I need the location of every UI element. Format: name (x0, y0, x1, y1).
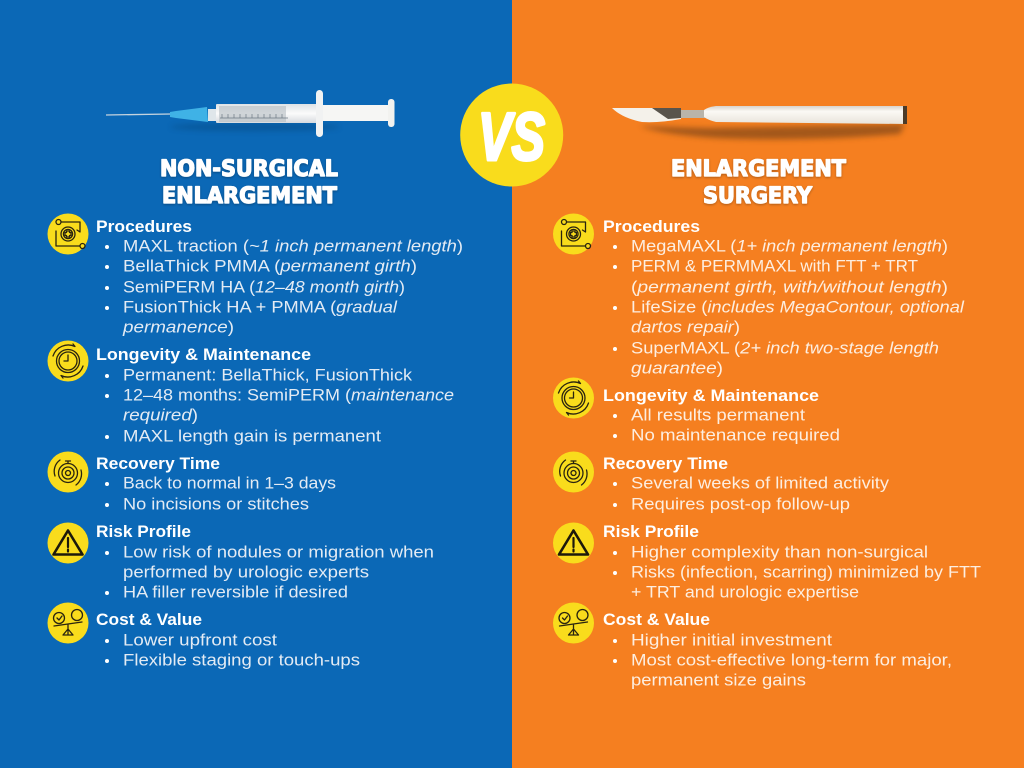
icon: syringe (106, 90, 394, 137)
heading: enlargement surgery (671, 157, 846, 209)
panel: surgery content (553, 214, 981, 690)
section: risk: Risks (infection, scarring) minimized by FTT (631, 564, 981, 582)
section: risk: HA filler reversible if desired (123, 584, 348, 602)
icon: recovery (553, 452, 594, 492)
panel: non-surgical content (48, 214, 463, 670)
section: recovery (603, 455, 890, 514)
section: cost: Most cost-effective long-term for major, (631, 652, 952, 670)
section: procedures: guarantee ) (631, 360, 723, 378)
section: risk: Risk Profile (96, 523, 191, 541)
section: procedures: Procedures (603, 218, 700, 236)
section: longevity: No maintenance required (631, 426, 840, 444)
section: cost: Higher initial investment (631, 632, 832, 650)
section: risk (96, 523, 434, 602)
section: recovery: Several weeks of limited activity (631, 474, 890, 492)
section: cost: Cost & Value (603, 611, 710, 629)
panel: surgery background (512, 0, 1024, 768)
heading: non-surgical enlargement (160, 157, 338, 209)
icon: scalpel (612, 106, 907, 139)
section: procedures (96, 218, 463, 336)
section: cost: Cost & Value (96, 611, 202, 629)
section: cost: permanent size gains (631, 672, 806, 690)
icon: cost (553, 602, 594, 644)
section: recovery: Recovery Time (603, 455, 728, 473)
heading: non-surgical enlargement: ENLARGEMENT (162, 184, 337, 209)
section: procedures: BellaThick PMMA ( permanent girth ) (123, 258, 417, 276)
section: longevity: All results permanent (631, 406, 805, 424)
section: longevity: MAXL length gain is permanent (123, 428, 381, 446)
icon: risk (553, 522, 594, 564)
icon: longevity (553, 378, 594, 418)
section: longevity (96, 346, 454, 446)
section: procedures: SemiPERM HA ( 12–48 month girth ) (123, 278, 405, 296)
section: risk: Low risk of nodules or migration when (123, 544, 434, 562)
section: risk: Risk Profile (603, 523, 699, 541)
section: procedures: MAXL traction ( ~1 inch permanent length ) (123, 238, 463, 256)
icon: risk (48, 522, 88, 564)
section: risk: + TRT and urologic expertise (631, 584, 859, 602)
heading: enlargement surgery: ENLARGEMENT (671, 157, 846, 182)
section: longevity: Permanent: BellaThick, FusionThick (123, 366, 413, 384)
section: procedures: permanence ) (122, 318, 234, 336)
section: longevity: 12–48 months: SemiPERM ( maintenance (123, 386, 454, 404)
section: cost: Flexible staging or touch-ups (123, 652, 360, 670)
section: procedures: Procedures (96, 218, 192, 236)
section: longevity: Longevity & Maintenance (96, 346, 311, 364)
panel: non-surgical background (0, 0, 512, 768)
section: longevity: Longevity & Maintenance (603, 387, 819, 405)
section: recovery: Requires post-op follow-up (631, 496, 850, 514)
section: risk: Higher complexity than non-surgical (631, 544, 928, 562)
icon: longevity (48, 340, 88, 382)
section: procedures: (permanent girth, with/without length ) (631, 278, 948, 296)
section: procedures: SuperMAXL ( 2+ inch two-stage length (631, 340, 939, 358)
icon: VS badge (460, 84, 563, 186)
section: procedures: FusionThick HA + PMMA ( gradual (123, 298, 398, 316)
section: procedures: dartos repair ) (631, 318, 740, 336)
section: recovery: Back to normal in 1–3 days (123, 474, 336, 492)
section: procedures: PERM & PERMMAXL with FTT + TRT (631, 258, 918, 276)
section: longevity (603, 387, 840, 444)
heading: enlargement surgery: SURGERY (703, 184, 813, 209)
heading: non-surgical enlargement: NON-SURGICAL (160, 157, 338, 182)
section: cost: Lower upfront cost (123, 632, 277, 650)
section: longevity: required ) (123, 406, 198, 424)
section: cost (603, 611, 952, 690)
section: cost (96, 611, 360, 670)
section: procedures (603, 218, 965, 378)
section: recovery (96, 455, 336, 514)
icon: recovery (48, 452, 88, 492)
section: risk: performed by urologic experts (123, 564, 369, 582)
section: procedures: MegaMAXL ( 1+ inch permanent length ) (631, 238, 948, 256)
section: recovery: Recovery Time (96, 455, 220, 473)
icon: procedures (48, 214, 88, 254)
icon: VS badge: VS (478, 99, 545, 175)
icon: procedures (553, 214, 594, 254)
section: recovery: No incisions or stitches (123, 496, 309, 514)
icon: cost (48, 602, 88, 644)
section: risk (603, 523, 981, 602)
section: procedures: LifeSize ( includes MegaContour, optional (631, 298, 965, 316)
